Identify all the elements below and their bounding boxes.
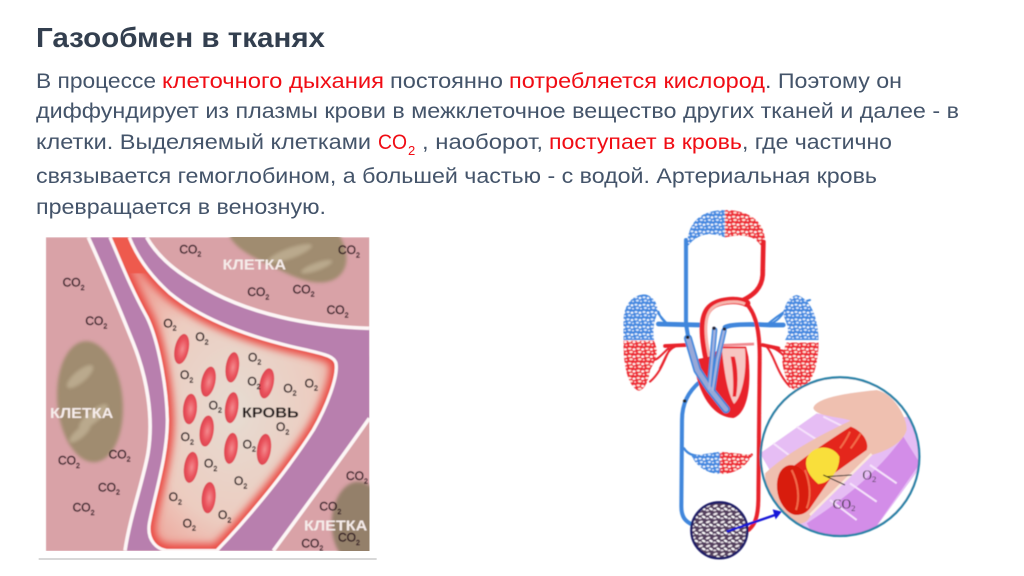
- blue vessels: [647, 240, 810, 525]
- labels: oxygen: 2: [205, 339, 209, 346]
- labels: cell captions: КЛЕТКА: [50, 406, 114, 422]
- magnified tissue view: 2: [872, 474, 876, 484]
- lungs: capillary beds: [623, 294, 818, 391]
- labels: carbon dioxide: CO: [247, 285, 265, 299]
- labels: oxygen: O: [305, 376, 314, 390]
- icon: left cell: [56, 340, 124, 464]
- labels: carbon dioxide: CO: [179, 242, 197, 256]
- labels: oxygen: 2: [314, 386, 318, 393]
- labels: carbon dioxide: CO: [73, 501, 91, 515]
- labels: carbon dioxide: 2: [127, 457, 131, 464]
- labels: oxygen: O: [218, 508, 227, 522]
- labels: oxygen: O: [183, 516, 192, 530]
- labels: cell captions: КЛЕТКА: [223, 257, 286, 273]
- labels: carbon dioxide: 2: [116, 490, 120, 497]
- labels: carbon dioxide: 2: [265, 294, 269, 301]
- labels: carbon dioxide: 2: [76, 463, 80, 470]
- yellow blob: [806, 447, 839, 484]
- labels: oxygen: 2: [173, 326, 177, 333]
- labels: carbon dioxide: CO: [63, 276, 81, 290]
- capillary lumen: [794, 426, 868, 514]
- labels: oxygen: 2: [257, 384, 261, 391]
- labels: oxygen: O: [204, 457, 213, 471]
- lower capillary bed: [692, 452, 752, 474]
- labels: carbon dioxide: 2: [356, 252, 360, 259]
- labels: oxygen: O: [180, 368, 189, 382]
- text block: body paragraph: потребляется кислород: [509, 69, 765, 93]
- labels: oxygen: O: [247, 375, 257, 389]
- panel: tissue gas exchange illustration: [39, 233, 385, 565]
- labels: carbon dioxide: CO: [327, 303, 345, 317]
- text block: body paragraph: связывается гемоглобином, а большей частью - с водой. Артериальная кровь: [36, 164, 877, 188]
- labels: carbon dioxide: 2: [81, 285, 85, 292]
- labels: carbon dioxide: CO: [301, 536, 319, 550]
- labels: oxygen: 2: [189, 377, 193, 384]
- labels: oxygen: O: [181, 430, 190, 444]
- label: blood: КРОВЬ: [242, 405, 299, 421]
- labels: oxygen: 2: [285, 429, 289, 436]
- icon: lower right cell: [330, 480, 370, 551]
- capillary wall and finger-like end: [765, 390, 907, 524]
- labels: carbon dioxide: 2: [197, 252, 201, 259]
- labels: carbon dioxide: CO: [346, 469, 364, 483]
- labels: carbon dioxide: 2: [91, 510, 95, 517]
- text block: body paragraph: , где частично: [742, 130, 892, 154]
- text block: body paragraph: постоянно: [390, 69, 503, 93]
- magnified tissue view: O: [862, 467, 872, 482]
- labels: carbon dioxide: 2: [103, 323, 107, 330]
- labels: oxygen: 2: [218, 408, 222, 415]
- labels: oxygen: 2: [190, 439, 194, 446]
- text block: body paragraph: CO: [378, 130, 407, 154]
- labels: carbon dioxide: CO: [58, 454, 76, 468]
- vena cava and pulmonary trunk: [688, 330, 726, 409]
- labels: oxygen: [163, 316, 318, 533]
- labels: oxygen: O: [276, 420, 285, 434]
- text block: body paragraph: В процессе: [36, 69, 156, 93]
- white cell outlines: [88, 237, 369, 551]
- arrow: tissue to magnified view: [727, 509, 782, 532]
- text block: body paragraph: . Поэтому он: [765, 69, 902, 93]
- labels: oxygen: 2: [243, 483, 247, 490]
- labels: oxygen: 2: [257, 360, 261, 367]
- title: Газообмен в тканях: [36, 22, 325, 53]
- magnified tissue view: [760, 377, 923, 540]
- panel: circulatory system diagram: [623, 210, 923, 558]
- labels: oxygen: O: [163, 316, 173, 330]
- top capillary bed: [687, 210, 765, 250]
- text block: body paragraph: превращается в венозную.: [36, 195, 326, 219]
- aortic arch inner highlight: [706, 302, 745, 357]
- labels: carbon dioxide: 2: [345, 312, 349, 319]
- labels: oxygen: 2: [192, 526, 196, 533]
- labels: carbon dioxide: 2: [364, 478, 368, 485]
- labels: oxygen: O: [234, 474, 243, 488]
- text block: body paragraph: 2: [408, 143, 415, 158]
- labels: carbon dioxide: 2: [311, 292, 315, 299]
- labels: oxygen: 2: [293, 391, 297, 398]
- labels: carbon dioxide: CO: [109, 447, 127, 461]
- labels: oxygen: O: [169, 490, 178, 504]
- labels: oxygen: 2: [213, 466, 217, 473]
- blood vessel: [128, 273, 334, 548]
- magnified tissue view: CO: [833, 496, 851, 511]
- labels: oxygen: 2: [178, 499, 182, 506]
- labels: carbon dioxide: 2: [337, 509, 341, 516]
- labels: carbon dioxide: CO: [338, 531, 356, 545]
- labels: carbon dioxide: CO: [338, 243, 356, 257]
- labels: cell captions: [50, 257, 368, 535]
- labels: oxygen: O: [248, 350, 257, 364]
- heart: [683, 327, 754, 418]
- labels: carbon dioxide: 2: [319, 546, 323, 553]
- labels: cell captions: КЛЕТКА: [304, 519, 368, 535]
- red blood cells: [172, 333, 277, 514]
- labels: oxygen: O: [195, 330, 205, 344]
- labels: carbon dioxide: [58, 242, 368, 553]
- labels: carbon dioxide: CO: [319, 500, 337, 514]
- text block: body paragraph: [36, 69, 959, 219]
- tissue circle: [691, 502, 747, 558]
- text block: body paragraph: клеточного дыхания: [162, 69, 384, 93]
- labels: oxygen: O: [209, 398, 218, 412]
- labels: oxygen: 2: [252, 447, 256, 454]
- icon: top right cell: [230, 233, 346, 282]
- red vessels: [650, 242, 797, 530]
- text block: body paragraph: диффундирует из плазмы крови в межклеточное вещество других тканей и далее - в: [36, 99, 959, 123]
- labels: carbon dioxide: CO: [85, 314, 103, 328]
- labels: oxygen: O: [243, 437, 252, 451]
- text block: body paragraph: поступает в кровь: [549, 130, 742, 154]
- labels: oxygen: O: [283, 381, 293, 395]
- text block: body paragraph: клетки. Выделяемый клетками: [36, 130, 371, 154]
- labels: carbon dioxide: CO: [293, 282, 311, 296]
- labels: carbon dioxide: 2: [356, 540, 360, 547]
- magnified tissue view: 2: [851, 503, 856, 513]
- labels: oxygen: 2: [227, 517, 231, 524]
- purple vessel wall: [88, 237, 369, 551]
- labels: carbon dioxide: CO: [98, 480, 116, 494]
- text block: body paragraph: , наоборот,: [422, 130, 543, 154]
